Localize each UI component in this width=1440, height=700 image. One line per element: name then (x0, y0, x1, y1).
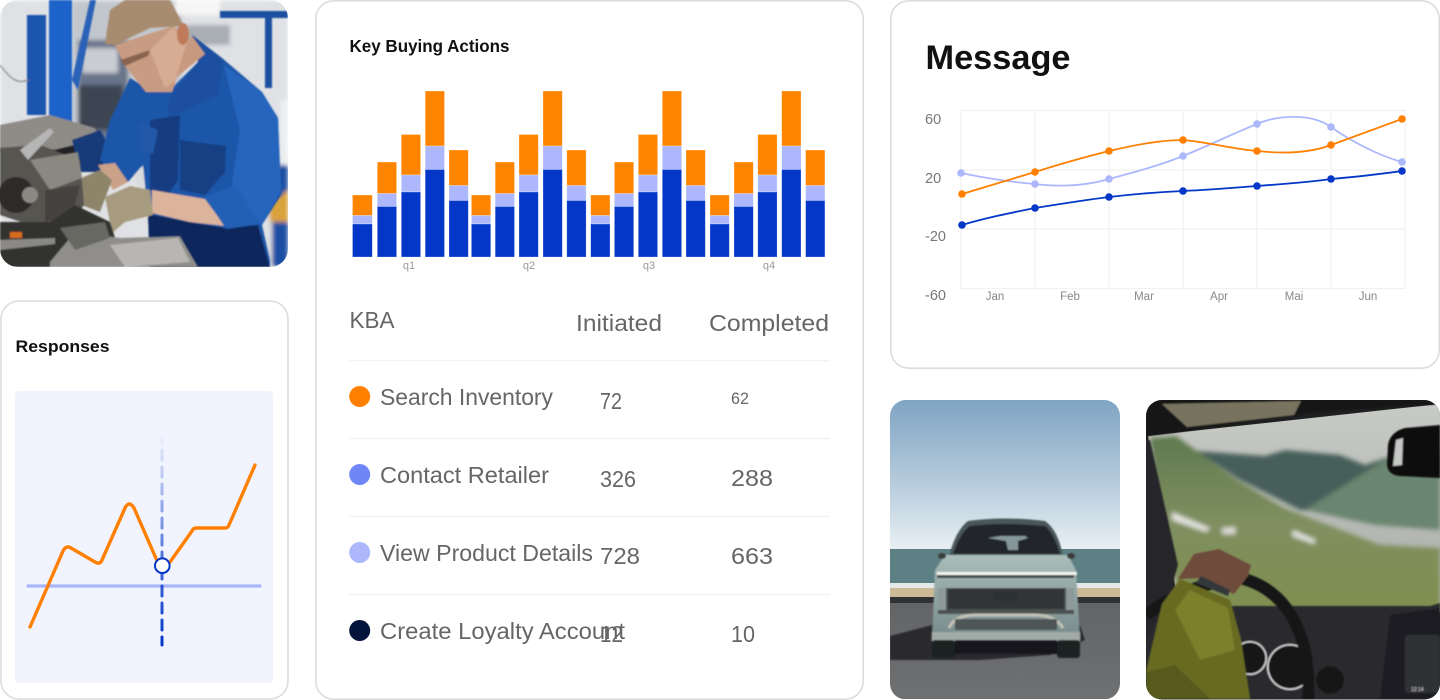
bar chart axis labels (403, 260, 775, 272)
line chart x axis labels: Jun (1359, 291, 1377, 303)
table header: Completed (709, 310, 829, 336)
stacked bar chart (352, 91, 825, 257)
table row: contact retailer: Contact Retailer (380, 462, 549, 488)
line chart x axis labels: Mar (1134, 291, 1154, 303)
heading: key buying actions: Key Buying Actions (350, 36, 510, 56)
table row: search inventory: 72 (600, 388, 622, 414)
bar chart axis labels: q2 (523, 260, 535, 272)
chart area: responses (15, 391, 273, 683)
line chart x axis labels: Apr (1210, 291, 1228, 303)
table header: KBA (350, 307, 395, 333)
table row: view product details (349, 540, 773, 569)
photo: driver's hand on steering wheel (1146, 400, 1440, 700)
table row: create loyalty account (349, 618, 755, 647)
table row: contact retailer: 326 (600, 466, 636, 492)
line chart y axis labels: 60 (925, 112, 941, 128)
table header (350, 307, 829, 336)
line series: blue (958, 167, 1406, 229)
heading: message: Message (926, 39, 1070, 77)
line chart y axis labels: 20 (925, 171, 941, 187)
table row: view product details: 728 (600, 543, 640, 569)
table row: create loyalty account: 10 (731, 621, 755, 647)
table row: view product details: View Product Details (380, 540, 593, 566)
line chart x axis labels: Mai (1285, 291, 1303, 303)
table header: Initiated (576, 310, 662, 336)
line chart x axis labels (986, 291, 1377, 303)
panel: responses (1, 301, 288, 699)
line series: orange (958, 115, 1406, 198)
table row: search inventory: 62 (731, 389, 749, 408)
table row: view product details: 663 (731, 543, 773, 569)
photo: driver's hand on steering wheel: 12:14 (1411, 687, 1424, 693)
line chart y axis labels: -60 (925, 288, 946, 304)
photo: SUV parked by the sea (890, 400, 1120, 699)
bar chart axis labels: q1 (403, 260, 415, 272)
line chart y axis labels: -20 (925, 229, 946, 245)
table row: search inventory: Search Inventory (380, 384, 553, 410)
table row: create loyalty account: Create Loyalty Account (380, 618, 626, 644)
panel: key buying actions (316, 1, 863, 699)
panel: message (891, 1, 1439, 368)
table row: contact retailer (349, 462, 773, 492)
bar chart axis labels: q3 (643, 260, 655, 272)
line chart x axis labels: Jan (986, 291, 1004, 303)
bar chart axis labels: q4 (763, 260, 775, 272)
line chart x axis labels: Feb (1060, 291, 1080, 303)
line chart y axis labels (925, 112, 946, 304)
table row: search inventory (349, 384, 749, 414)
line series: lavender (957, 117, 1406, 188)
table row: contact retailer: 288 (731, 465, 773, 491)
table row: create loyalty account: 12 (600, 621, 623, 647)
heading: responses: Responses (16, 337, 110, 356)
photo: mechanic working on engine (0, 0, 288, 267)
